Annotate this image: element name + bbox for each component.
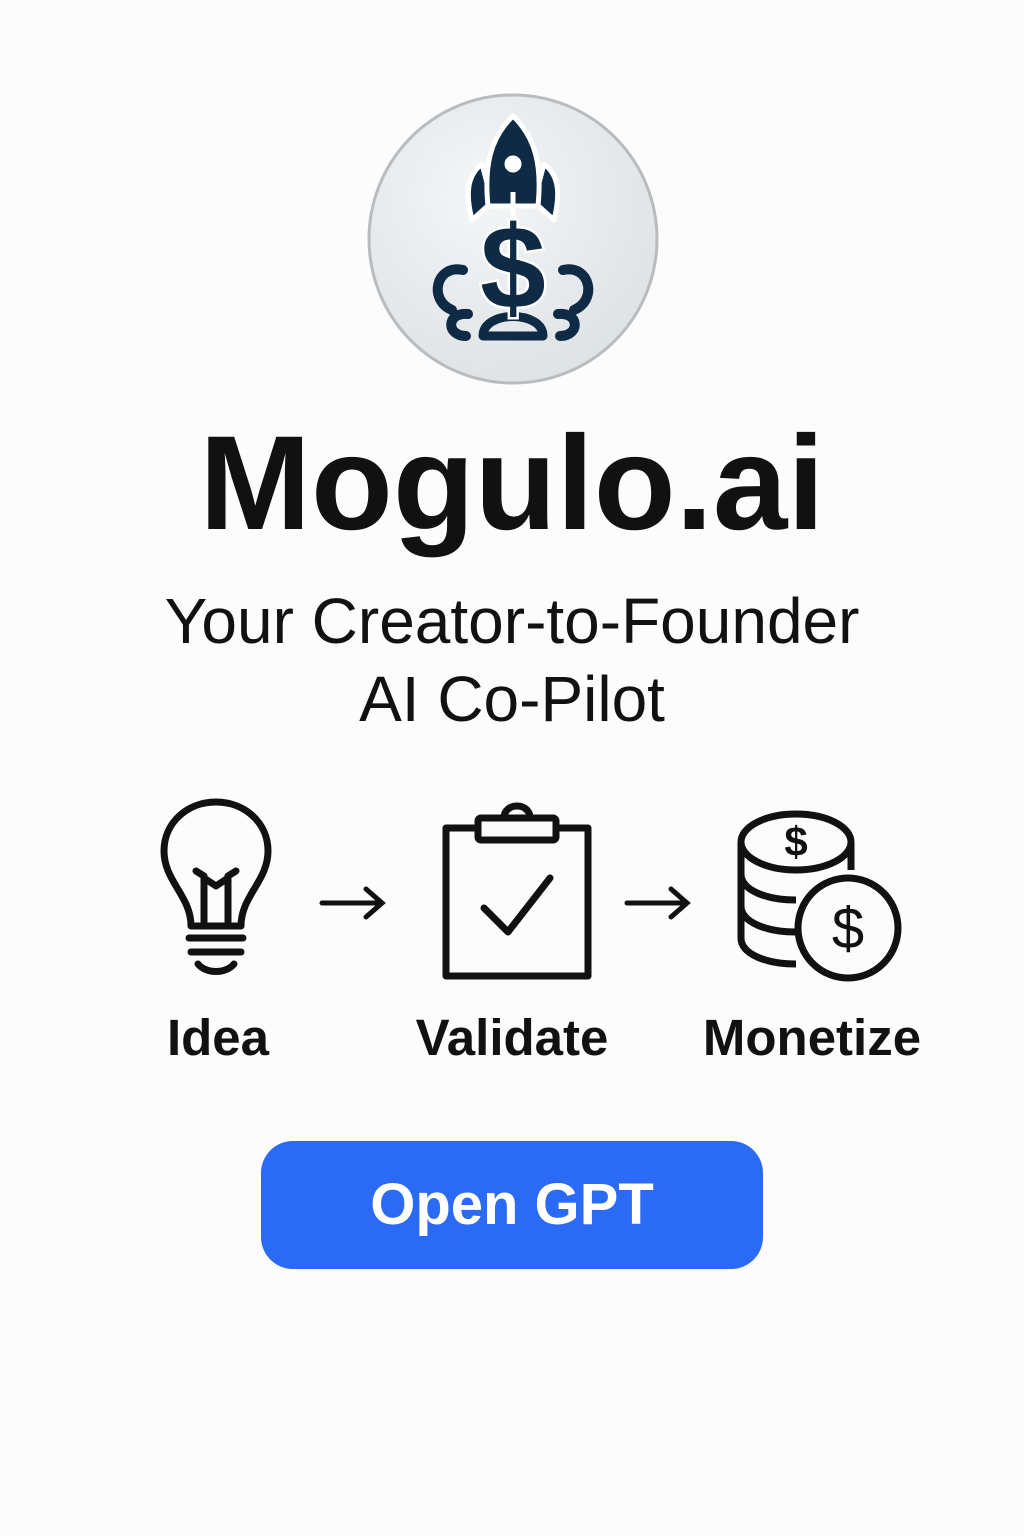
icon: coins: $ [784,818,808,865]
arrow 1 [320,886,386,920]
logo: rocket dollar badge [368,94,658,384]
title: Mogulo.ai [199,409,825,558]
arrow 2 [624,886,691,920]
button: Open GPT: Open GPT [370,1172,654,1237]
subtitle: Your Creator-to-Founder [165,585,859,657]
icon: coins [738,810,902,982]
icon: clipboard check [442,802,592,980]
icon: coins: $ [832,896,864,961]
subtitle: AI Co-Pilot [359,663,665,735]
icon: lightbulb [160,798,272,975]
label: Validate: Validate [416,1009,608,1066]
label: Idea: Idea [167,1009,269,1066]
logo: rocket dollar badge: $ [480,202,546,334]
label: Monetize: Monetize [703,1009,921,1066]
subtitle [165,585,859,735]
button: Open GPT [261,1141,763,1269]
